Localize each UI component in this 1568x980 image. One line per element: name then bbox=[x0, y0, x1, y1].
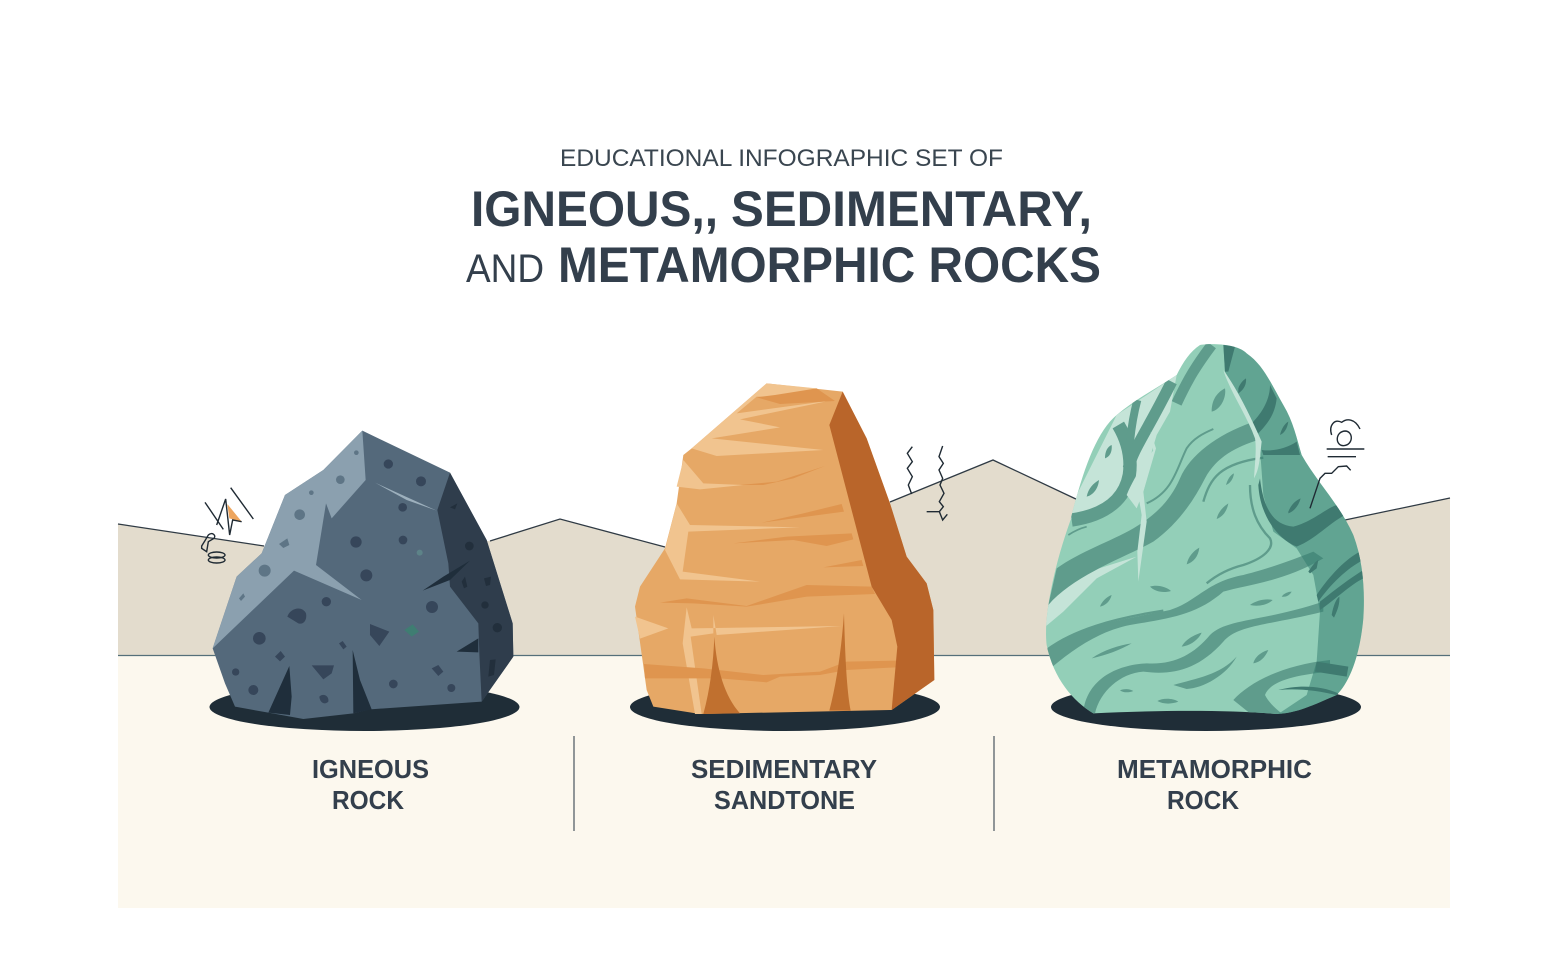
igneous doodle bbox=[202, 488, 253, 563]
vesicles on light facet bbox=[239, 450, 359, 601]
igneous rock shadow bbox=[210, 683, 520, 731]
label: metamorphic: ROCK bbox=[1167, 785, 1239, 815]
pale veins bbox=[1137, 370, 1262, 582]
shaded side bbox=[829, 392, 934, 710]
label: sedimentary bbox=[691, 754, 877, 815]
metamorphic doodle bbox=[1310, 420, 1364, 508]
label: sedimentary: SEDIMENTARY bbox=[691, 754, 877, 784]
label: sedimentary: SANDTONE bbox=[714, 785, 855, 815]
cracks bbox=[268, 561, 478, 715]
sedimentary doodle bbox=[907, 446, 947, 520]
mountain silhouette bbox=[118, 460, 1450, 655]
title line 1: IGNEOUS,, bbox=[471, 181, 718, 237]
label: metamorphic: METAMORPHIC bbox=[1117, 754, 1312, 784]
vesicles bbox=[232, 459, 455, 703]
metamorphic rock bbox=[1046, 344, 1364, 714]
mountain ridge line bbox=[118, 460, 1450, 547]
shaded right side bbox=[1224, 344, 1364, 714]
igneous rock bbox=[213, 431, 513, 719]
rock body bbox=[1046, 344, 1364, 714]
rock body bbox=[635, 383, 934, 714]
label: metamorphic bbox=[1117, 754, 1312, 815]
dividers bbox=[574, 736, 994, 831]
pale upper left bbox=[1070, 375, 1177, 522]
subtitle: EDUCATIONAL INFOGRAPHIC SET OF bbox=[560, 145, 1003, 172]
title line 2: METAMORPHIC ROCKS bbox=[558, 237, 1101, 293]
label: igneous: IGNEOUS bbox=[312, 754, 429, 784]
deep cracks bbox=[703, 613, 851, 714]
light highlights bbox=[635, 383, 842, 714]
lens flecks bbox=[1087, 388, 1292, 704]
title line 1 bbox=[471, 181, 1092, 237]
title line 1: SEDIMENTARY, bbox=[731, 181, 1092, 237]
darker strata bbox=[644, 388, 896, 682]
green mineral bbox=[404, 624, 419, 637]
orange flag bbox=[227, 504, 242, 522]
label: igneous: ROCK bbox=[332, 785, 404, 815]
banding bbox=[1043, 388, 1330, 715]
header bbox=[466, 145, 1101, 293]
metamorphic rock shadow bbox=[1051, 683, 1361, 731]
sedimentary rock bbox=[635, 383, 934, 714]
shaded side bbox=[437, 473, 513, 702]
rock body bbox=[213, 431, 513, 719]
thin curved lines bbox=[1147, 429, 1213, 503]
infographic canvas bbox=[118, 149, 1450, 908]
ground panel bbox=[118, 656, 1450, 908]
light facet bbox=[213, 431, 366, 648]
vesicles on shaded side bbox=[450, 503, 502, 677]
pale lower left bbox=[1043, 557, 1137, 628]
dark bands on right side bbox=[1223, 345, 1363, 696]
light crack bbox=[375, 483, 437, 511]
sedimentary rock shadow bbox=[630, 683, 940, 731]
horizon line bbox=[118, 654, 1450, 656]
label: igneous bbox=[312, 754, 429, 815]
title line 2: AND bbox=[466, 247, 544, 291]
branching stem bands bbox=[1047, 345, 1271, 650]
